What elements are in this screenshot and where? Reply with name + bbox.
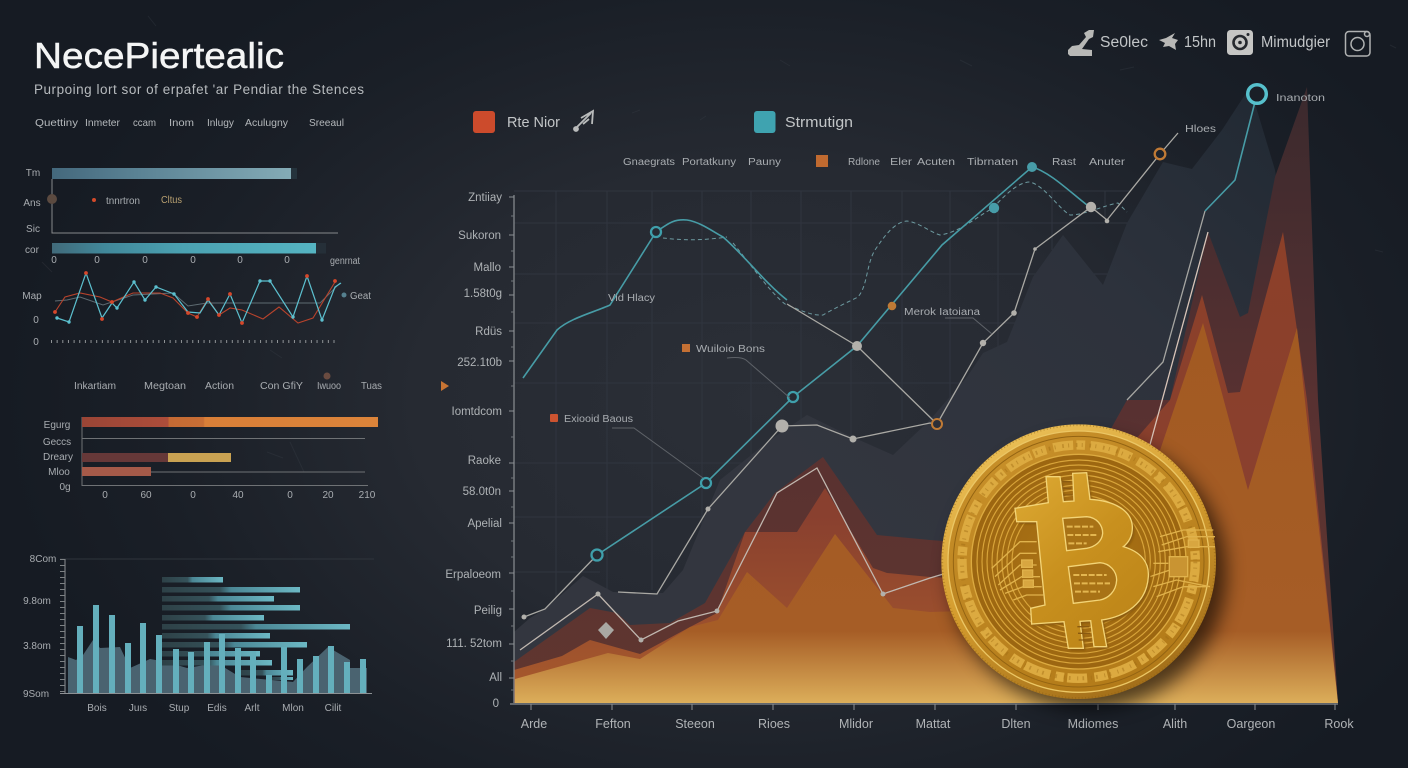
- side pointer arrow: [441, 381, 449, 391]
- red legend dot: [92, 198, 96, 202]
- x axis labels: Steeon: [675, 717, 715, 731]
- combo axes: [60, 559, 372, 694]
- coin shadow: [950, 437, 1227, 710]
- top grid line: [60, 558, 374, 560]
- panel: small line chart: [22, 271, 371, 348]
- inner engraved disc: [971, 454, 1186, 669]
- line chart labels: 0: [33, 337, 39, 348]
- stacked bar labels: 210: [359, 490, 376, 501]
- stacked bar labels: Egurg: [44, 420, 70, 431]
- sub legend labels: Acuten: [917, 157, 955, 168]
- red series: [55, 282, 335, 323]
- grid: [514, 191, 1130, 640]
- bar panel labels: genrnat: [330, 256, 360, 267]
- pale series D: [1148, 232, 1208, 452]
- teal series: [57, 273, 341, 323]
- combo labels: Mlon: [282, 703, 304, 714]
- bar panel labels: Tm: [26, 168, 40, 179]
- legend swatch teal: [754, 111, 776, 133]
- annotations: Wuiloio Bons: [696, 344, 765, 355]
- line chart labels: Geat: [350, 291, 371, 302]
- line chart labels: Map: [22, 291, 42, 302]
- bar panel labels: Sic: [26, 224, 40, 235]
- bitcoin symbol: [1015, 473, 1150, 651]
- toolbar label two: 15hn: [1184, 34, 1216, 51]
- coin face: [948, 431, 1209, 692]
- bar panel labels: 0: [190, 255, 196, 266]
- combo labels: 9.8om: [23, 596, 51, 607]
- bar panel labels: tnnrtron: [106, 196, 140, 207]
- area: orange layer: [515, 323, 1338, 703]
- area: maroon layer: [514, 87, 1338, 703]
- large teal ring marker: [1248, 85, 1266, 103]
- annotations: Hloes: [1185, 124, 1216, 135]
- icon: star: [1159, 33, 1178, 50]
- grey series A continued: [618, 133, 1178, 594]
- bar panel labels: Cltus: [161, 195, 182, 206]
- y axis labels: 252.1t0b: [457, 357, 502, 369]
- orange dot marker: [888, 302, 896, 310]
- bar: short red: [82, 467, 151, 476]
- sub legend labels: [623, 157, 1126, 168]
- combo labels: Bois: [87, 703, 107, 714]
- category labels: Con GfiY: [260, 381, 303, 392]
- y axis labels: Iomtdcom: [452, 406, 502, 418]
- callout leader lines: [612, 318, 992, 478]
- icon: tool: [1068, 30, 1094, 56]
- axis ticks: [509, 197, 1335, 710]
- combo labels: Arlt: [244, 703, 260, 714]
- horizontal bars: [162, 577, 350, 680]
- grey series A: [524, 555, 597, 617]
- x axis labels: Dlten: [1001, 717, 1031, 731]
- sub legend labels: Pauny: [748, 157, 781, 168]
- filter row: Quettiny: [35, 117, 79, 129]
- y axis labels: [445, 192, 502, 710]
- orange ring marker: [932, 419, 942, 429]
- bar panel labels: Ans: [23, 198, 41, 209]
- x axis labels: Oargeon: [1227, 717, 1275, 731]
- bar panel labels: 0: [142, 255, 148, 266]
- stacked bar labels: Dreary: [43, 452, 73, 463]
- filter row: [35, 117, 344, 129]
- y axis labels: Peilig: [474, 605, 502, 617]
- legend label teal: Strmutign: [785, 114, 853, 131]
- toolbar label one: Se0lec: [1100, 34, 1148, 51]
- stacked bar labels: 0: [190, 490, 196, 501]
- combo labels: 8Com: [30, 554, 56, 565]
- combo labels: 9Som: [23, 689, 49, 700]
- minor ticks: [511, 216, 514, 690]
- category labels: Tuas: [361, 381, 382, 392]
- callout square orange: [682, 344, 690, 352]
- area series: [68, 640, 367, 693]
- grey node markers: [522, 202, 1109, 643]
- diamond marker: [598, 622, 614, 639]
- x axis labels: Mattat: [916, 717, 951, 731]
- stacked bar labels: 0g: [59, 482, 71, 493]
- sub legend labels: Rast: [1052, 157, 1076, 168]
- x axis labels: Rioes: [758, 717, 790, 731]
- stacked bar labels: Geccs: [43, 437, 71, 448]
- y axis labels: Apelial: [467, 518, 502, 530]
- axis ticks: [60, 559, 65, 693]
- bar: top blue: [52, 168, 297, 179]
- bar panel labels: cor: [25, 245, 40, 256]
- line chart labels: [22, 291, 371, 348]
- sub legend swatch: [816, 155, 828, 167]
- annotations: Inanoton: [1276, 93, 1325, 104]
- reeded edge: [942, 425, 1215, 698]
- lettering band: [953, 436, 1204, 687]
- bar: full orange: [82, 417, 378, 427]
- y axis labels: Raoke: [468, 455, 501, 467]
- toolbar label three: Mimudgier: [1261, 34, 1330, 51]
- sub legend labels: Portatkuny: [682, 157, 736, 168]
- grey series: [55, 283, 340, 306]
- panel: orange stacked bars: [43, 417, 378, 501]
- red points: [53, 271, 337, 325]
- bar: maroon and yellow: [82, 453, 231, 462]
- stacked bar labels: 60: [140, 490, 152, 501]
- grey falling segment: [787, 304, 937, 424]
- teal points: [55, 279, 324, 324]
- icon: outlined camera: [1346, 32, 1370, 56]
- category labels: Megtoan: [144, 381, 186, 392]
- y axis labels: 1.58t0g: [464, 288, 502, 300]
- combo labels: [23, 554, 342, 714]
- stacked bar labels: 0: [102, 490, 108, 501]
- circuit traces left: [992, 542, 1043, 600]
- main axes: [510, 195, 1338, 704]
- grey series C: [1127, 211, 1205, 400]
- axis lines: [52, 179, 338, 233]
- filter row: Inmeter: [85, 117, 120, 129]
- sub legend labels: Eler: [890, 157, 913, 168]
- legend swatch red: [473, 111, 495, 133]
- category label row: [74, 372, 382, 392]
- top right toolbar: [1068, 30, 1370, 56]
- x axis labels: Rook: [1324, 717, 1354, 731]
- circuit traces right: [1150, 530, 1215, 597]
- subtitle: Purpoing lort sor of erpafet 'ar Pendiar the Stences: [34, 82, 364, 97]
- concentric engraved rings: [977, 460, 1180, 663]
- y axis labels: Sukoron: [458, 230, 501, 242]
- panel: main chart: [441, 85, 1354, 731]
- filled teal markers: [989, 162, 1037, 213]
- y axis labels: 0: [493, 698, 499, 710]
- y axis labels: 111. 52tom: [446, 638, 502, 650]
- category labels: Iwuoo: [317, 381, 341, 392]
- category labels: Action: [205, 381, 234, 392]
- vertical bars: [77, 605, 366, 693]
- marker blob: [47, 194, 57, 204]
- annotations: Merok Iatoiana: [904, 307, 980, 318]
- bar panel labels: 0: [94, 255, 100, 266]
- axis and rules: [82, 417, 368, 486]
- x axis labels: [521, 717, 1354, 731]
- bar panel labels: [23, 168, 360, 267]
- stacked bar labels: [43, 420, 376, 501]
- annotations: Vid Hlacy: [608, 293, 655, 304]
- brown marker: [324, 372, 330, 380]
- combo labels: Stup: [169, 703, 190, 714]
- x axis labels: Mdiomes: [1068, 717, 1118, 731]
- stacked bar labels: Mloo: [48, 467, 70, 478]
- line chart labels: 0: [33, 315, 39, 326]
- combo labels: 3.8om: [23, 641, 51, 652]
- filter row: Aculugny: [245, 117, 289, 129]
- filter row: ccam: [133, 117, 156, 129]
- icon: rocket arrow: [574, 111, 593, 131]
- sub legend labels: Anuter: [1089, 157, 1126, 168]
- legend row: [473, 111, 1126, 168]
- filter row: Inlugy: [207, 117, 235, 129]
- bar panel labels: 0: [284, 255, 290, 266]
- filter row: Inom: [169, 117, 194, 129]
- teal series: [523, 94, 1257, 555]
- combo labels: Cilit: [325, 703, 342, 714]
- combo labels: Juıs: [129, 703, 147, 714]
- area: slate layer: [514, 87, 1338, 703]
- callout square red: [550, 414, 558, 422]
- annotations: [564, 93, 1325, 425]
- icon: bitcoin coin: [941, 424, 1227, 710]
- bar: teal: [52, 243, 326, 254]
- x axis labels: Arde: [521, 717, 547, 731]
- icon: filled camera: [1227, 30, 1253, 55]
- dotted baseline: [51, 340, 339, 343]
- panel: bar and area combo chart: [23, 554, 374, 714]
- sub legend labels: Tibrnaten: [967, 157, 1018, 168]
- area: red layer: [514, 232, 1338, 703]
- combo labels: Edis: [207, 703, 227, 714]
- category labels: [74, 381, 382, 392]
- stacked bar labels: 20: [322, 490, 334, 501]
- x axis labels: Alith: [1163, 717, 1187, 731]
- legend label red: Rte Nior: [507, 114, 560, 131]
- stacked bar labels: 40: [232, 490, 244, 501]
- panel: horizontal progress bars: [23, 168, 360, 267]
- stacked bar labels: 0: [287, 490, 293, 501]
- coin rim: [941, 424, 1216, 699]
- title block: [34, 35, 364, 129]
- y axis labels: All: [489, 672, 502, 684]
- bar panel labels: 0: [51, 255, 57, 266]
- sub legend labels: Rdlone: [848, 157, 880, 168]
- sub legend labels: Gnaegrats: [623, 157, 675, 168]
- y axis labels: 58.0t0n: [463, 486, 501, 498]
- grey series B: [520, 468, 950, 650]
- legend dot: [342, 292, 346, 298]
- y axis labels: Erpaloeom: [445, 569, 501, 581]
- bar panel labels: 0: [237, 255, 243, 266]
- orange ring marker top: [1155, 149, 1165, 159]
- y axis labels: Rdüs: [475, 326, 502, 338]
- x axis labels: Mlidor: [839, 717, 873, 731]
- y axis labels: Mallo: [474, 262, 501, 274]
- title: NecePiertealic: [34, 35, 284, 76]
- x axis labels: Fefton: [595, 717, 631, 731]
- annotations: Exiooid Baous: [564, 414, 633, 425]
- ring markers teal: [592, 227, 798, 560]
- y axis labels: Zntiiay: [468, 192, 502, 204]
- dashed teal series: [663, 182, 1127, 315]
- category labels: Inkartiam: [74, 381, 116, 392]
- filter row: Sreeaul: [309, 117, 344, 129]
